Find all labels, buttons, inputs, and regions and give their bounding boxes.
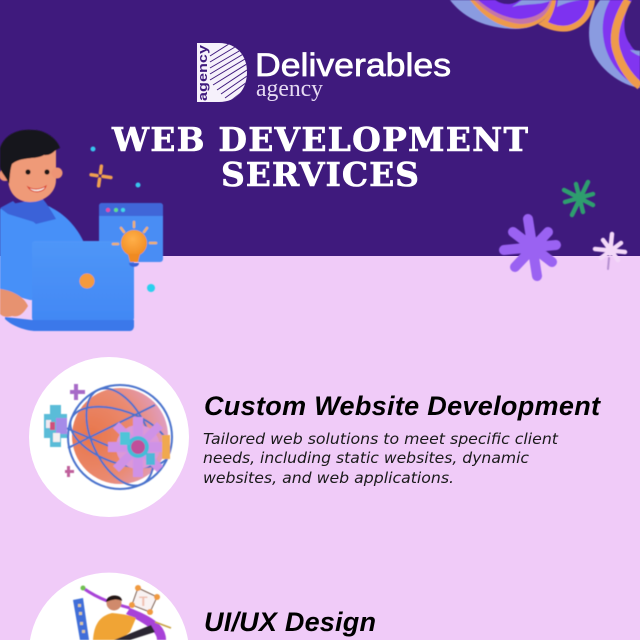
character body: [0, 203, 86, 300]
icon: designer illustration: [30, 573, 188, 640]
description: [203, 430, 559, 487]
decorative swirl: top right: [450, 0, 640, 88]
title: [111, 120, 528, 194]
gear right: [108, 417, 170, 477]
description: needs, including static websites, dynamic: [203, 449, 530, 467]
logo: [195, 42, 451, 102]
tool strip: [73, 598, 89, 640]
panel: custom website development: [29, 357, 601, 517]
title: SERVICES: [221, 155, 419, 194]
bezier curve: [83, 588, 130, 608]
illustration: developer with laptop: [0, 130, 163, 331]
logo wordmark: Deliverables: [255, 47, 451, 83]
heading: Custom Website Development: [204, 391, 601, 421]
title: WEB DEVELOPMENT: [111, 120, 528, 159]
heading: UI/UX Design: [204, 607, 376, 637]
icon: sparkle dots: [90, 146, 155, 292]
icon: purple star: [504, 219, 556, 276]
gear left: [44, 405, 67, 447]
icon: globe with gears: [29, 357, 189, 517]
character head: [8, 150, 56, 202]
logo mark: agency: [195, 44, 210, 101]
description: Tailored web solutions to meet specific client: [203, 430, 559, 448]
browser window: [99, 203, 163, 262]
laptop: [32, 241, 134, 321]
header background: [0, 0, 640, 256]
panel: UI/UX design: [30, 573, 376, 640]
logo mark: [197, 43, 247, 102]
lightbulb: [113, 222, 156, 267]
hand: [0, 289, 28, 317]
logo tagline: agency: [256, 76, 323, 102]
description: websites, and web applications.: [203, 469, 454, 487]
text frame: T: [139, 593, 148, 609]
designer: [93, 613, 136, 640]
icon: pale star: [595, 234, 625, 269]
icon: green star: [564, 182, 593, 215]
